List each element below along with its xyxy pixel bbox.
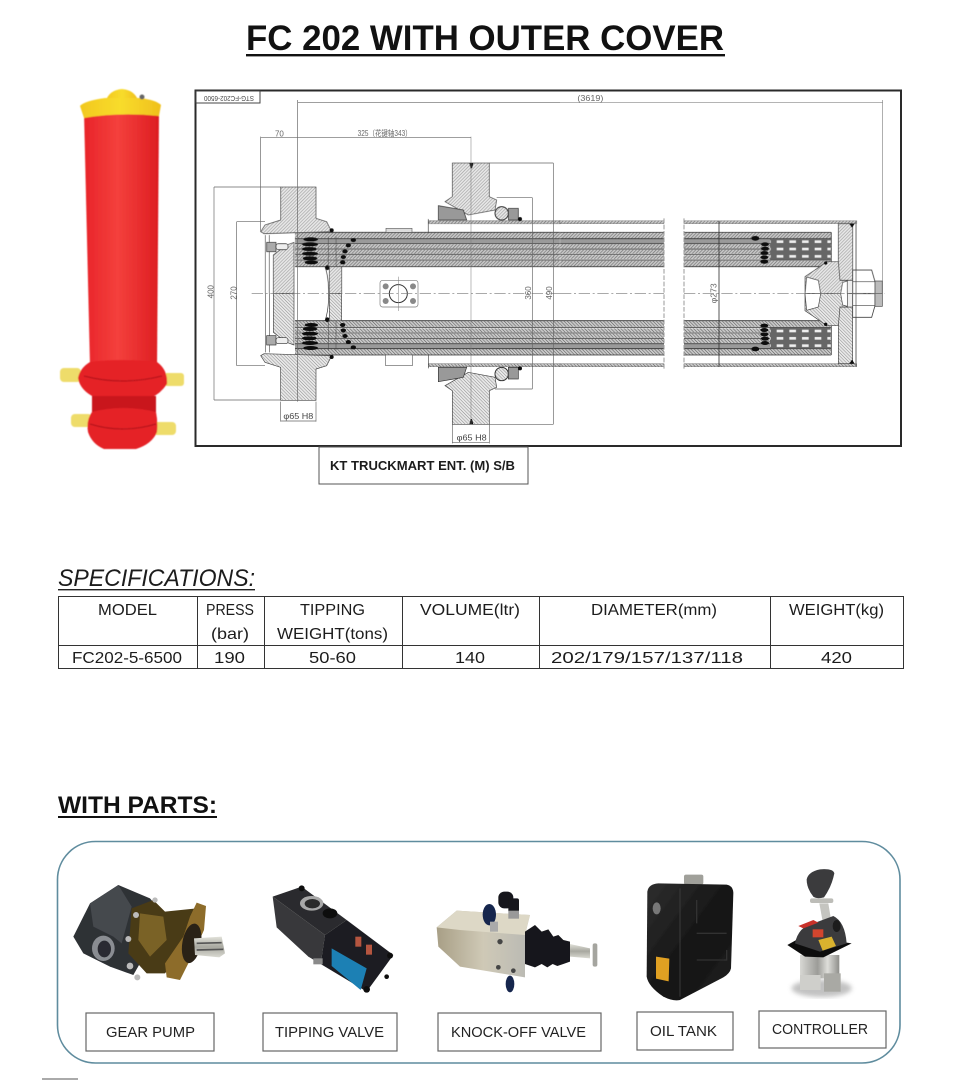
hydraulic cylinder cross-section: left side [208,100,560,444]
table header row: WEIGHT(tons) [277,626,388,643]
dimension labels: 70 [275,129,284,138]
table data row [72,650,852,667]
table data row: 50-60 [309,650,356,667]
panel: parts [58,842,900,1063]
diameter label: φ273 [710,283,719,303]
table header row [98,602,884,643]
table header row: WEIGHT(kg) [789,602,884,619]
specifications table [58,596,904,669]
cylinder red body [84,112,159,366]
company label box [319,447,528,484]
title: FC 202 WITH OUTER COVER [246,19,724,58]
label: gear pump [86,1013,214,1051]
icon: knock-off valve [437,892,597,992]
dimension labels: φ65 H8 [457,433,487,442]
engineering drawing frame [196,90,901,446]
icon: gear pump [73,885,225,980]
dimension labels: 490 [545,286,554,300]
label: controller: CONTROLLER [772,1021,868,1038]
label: knock-off valve [438,1013,601,1051]
cylinder lower collars [78,360,167,449]
drawing title block: STG-FC202-6500 [204,94,254,103]
hydraulic cylinder cross-section: right side [560,95,885,369]
drawing title block [196,91,260,103]
cylinder top dome [106,89,138,100]
label: tipping valve: TIPPING VALVE [275,1024,384,1041]
icon: oil tank [647,875,733,1000]
dimension labels: φ65 H8 [283,412,314,421]
table header row: TIPPING [300,602,365,619]
table data row: 202/179/157/137/118 [551,650,743,667]
table header row: PRESS [206,602,254,619]
dimension labels: 360 [524,286,533,300]
dimension labels [207,128,554,442]
cylinder pins [60,368,184,435]
label: oil tank [637,1012,733,1050]
table header row: MODEL [98,602,157,619]
table data row: 190 [214,650,245,667]
dimension labels: 400 [207,284,216,298]
label: gear pump: GEAR PUMP [106,1024,195,1041]
company label box: KT TRUCKMART ENT. (M) S/B [330,459,515,473]
label: tipping valve [263,1013,397,1051]
label: controller [759,1011,886,1048]
table header row: (bar) [211,626,249,643]
label: knock-off valve: KNOCK-OFF VALVE [451,1024,586,1041]
table data row: 420 [821,650,852,667]
table header row: VOLUME(ltr) [420,602,520,619]
icon: controller [787,869,852,997]
specifications heading: SPECIFICATIONS: [58,565,255,592]
dimension labels: 270 [229,286,238,300]
with parts heading: WITH PARTS: [58,792,217,819]
cylinder yellow cap [80,98,161,118]
icon: tipping valve [273,885,393,993]
dimension labels: 325（花键轴343） [358,128,412,138]
table header row: DIAMETER(mm) [591,602,717,619]
table data row: 140 [455,650,485,667]
label: oil tank: OIL TANK [650,1023,717,1040]
table data row: FC202-5-6500 [72,650,182,667]
overall length label: (3619) [577,94,604,103]
cylinder photo [60,89,184,449]
